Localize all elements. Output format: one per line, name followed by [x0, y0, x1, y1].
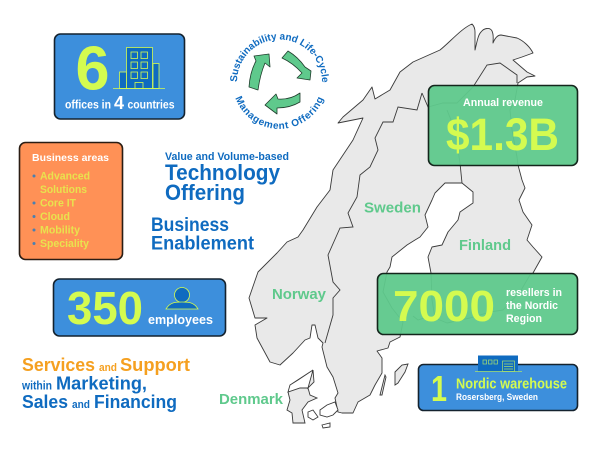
- circular text: bottom: Management Offering: [235, 96, 324, 129]
- heading: business areas: Business areas: [32, 152, 109, 164]
- panel: offices: [54, 34, 184, 119]
- text block: services and support: Support: [120, 354, 190, 375]
- list: business areas: Core IT: [40, 198, 76, 210]
- list: business areas: Cloud: [40, 211, 70, 223]
- text block: business enablement: Enablement: [151, 232, 254, 254]
- list: business areas: Advanced: [40, 170, 90, 182]
- caption: offices in 4 countries: [65, 93, 174, 113]
- text block: services and support: Marketing,: [56, 372, 147, 394]
- panel: resellers: [378, 274, 578, 334]
- map: Nordic region: [219, 24, 542, 428]
- text block: business enablement: Business: [151, 214, 229, 236]
- list: business areas: Solutions: [40, 184, 87, 196]
- panel: annual revenue: [428, 86, 578, 166]
- text block: services and support: Services: [22, 354, 95, 375]
- label: Sweden: Sweden: [364, 200, 421, 216]
- caption: annual revenue: Annual revenue: [463, 97, 543, 109]
- panel: employees: [54, 279, 226, 336]
- text block: technology offering: Offering: [165, 180, 245, 205]
- circular text: top: Sustainability and Life-Cycle: [230, 34, 329, 82]
- list: business areas: Speciality: [40, 238, 90, 250]
- text block: services and support: within: [21, 380, 52, 392]
- caption: resellers in the Nordic Region: resellers in: [506, 287, 562, 299]
- caption: Rosersberg, Sweden: Rosersberg, Sweden: [456, 392, 538, 402]
- caption: resellers in the Nordic Region: Region: [506, 313, 542, 325]
- caption: Nordic warehouse: Nordic warehouse: [456, 376, 567, 392]
- panel: warehouse: [418, 356, 578, 410]
- number: 1: 1: [431, 368, 447, 409]
- map: Denmark: [287, 370, 338, 428]
- caption: resellers in the Nordic Region: [506, 287, 562, 325]
- icon: person: [166, 288, 198, 309]
- list: business areas: [32, 170, 90, 250]
- text block: services and support: Sales: [22, 391, 68, 412]
- panel: business areas: [20, 142, 122, 260]
- label: Denmark: Denmark: [219, 391, 284, 408]
- caption: resellers in the Nordic Region: the Nordic: [506, 300, 558, 312]
- caption: employees: employees: [148, 312, 213, 327]
- map: mainland Norway, Sweden and Finland: [249, 24, 542, 413]
- text block: business enablement: [151, 214, 254, 254]
- number: $1.3B: $1.3B: [446, 109, 559, 160]
- label: Finland: Finland: [459, 237, 511, 254]
- label: Norway: Norway: [272, 286, 327, 303]
- text block: services and support: Financing: [94, 391, 177, 412]
- caption: offices in 4 countries: 4: [114, 93, 124, 113]
- map: Norway-Sweden border: [325, 93, 422, 343]
- number: 6: 6: [76, 34, 110, 104]
- text block: services and support: [21, 354, 190, 412]
- text block: technology offering: Value and Volume-based: [165, 151, 289, 163]
- caption: offices in 4 countries: offices in: [65, 100, 111, 112]
- icon: office building: [113, 48, 165, 88]
- list: business areas: Mobility: [40, 224, 81, 236]
- map: Baltic islands: [380, 316, 427, 395]
- text block: technology offering: Technology: [165, 160, 281, 185]
- icon: warehouse: [475, 356, 522, 372]
- text block: services and support: and: [72, 399, 90, 411]
- map: Finland borders: [422, 63, 517, 183]
- number: 7000: 7000: [393, 282, 495, 331]
- number: 350: 350: [67, 282, 143, 334]
- arrows: cycle: [249, 51, 311, 114]
- text block: services and support: and: [99, 362, 117, 374]
- circular diagram: sustainability and life-cycle: [230, 34, 329, 129]
- caption: offices in 4 countries: countries: [128, 100, 174, 112]
- text block: technology offering: [165, 151, 289, 205]
